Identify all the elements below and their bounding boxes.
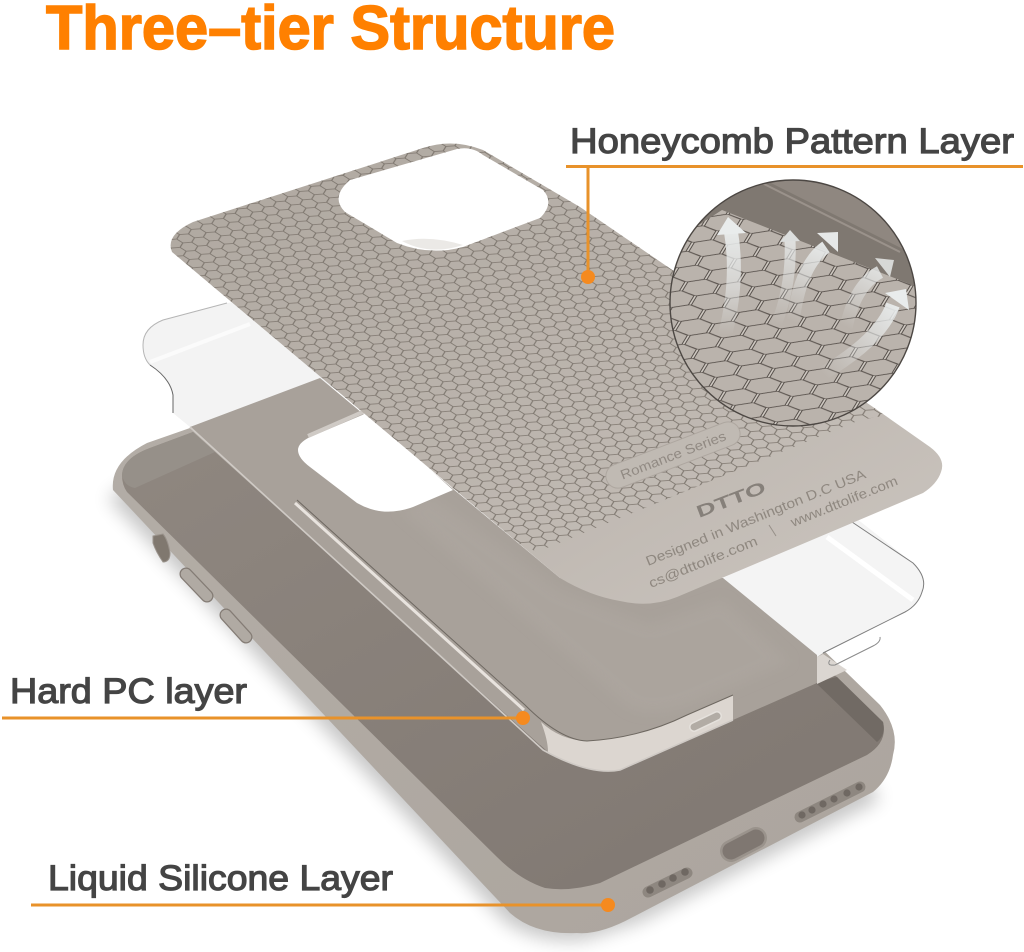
series badge: Romance Series bbox=[618, 428, 728, 483]
side slot bbox=[829, 637, 880, 665]
silicone inner cavity bbox=[122, 432, 884, 889]
highlight stripe on clear corner bbox=[150, 324, 250, 362]
translucent grey plate bbox=[190, 378, 817, 771]
hard PC label text: Hard PC layer bbox=[10, 672, 247, 711]
label: honeycomb pattern layer bbox=[566, 122, 1023, 284]
liquid silicone label text: Liquid Silicone Layer bbox=[48, 859, 393, 898]
inner wall upper left bbox=[122, 432, 215, 488]
label: liquid silicone layer bbox=[31, 859, 615, 912]
bottom slot bbox=[694, 716, 717, 727]
camera opening in PC layer bbox=[298, 413, 453, 512]
magnified honeycomb cells bbox=[670, 212, 916, 424]
honeycomb dot bbox=[581, 270, 595, 284]
series badge bbox=[602, 418, 744, 492]
email: cs@dttolife.com bbox=[647, 533, 760, 591]
highlight stripe lower right bbox=[827, 537, 913, 600]
clear plastic upper left corner bbox=[143, 300, 340, 427]
bottom bevel bbox=[541, 695, 733, 771]
honeycomb underline bbox=[566, 165, 1023, 168]
liquid silicone dot bbox=[601, 898, 615, 912]
honeycomb texture bbox=[170, 144, 883, 551]
hard PC leader bbox=[2, 716, 523, 720]
magnifier circle bbox=[669, 179, 917, 427]
power button bbox=[226, 615, 246, 637]
lower right corner piece bbox=[817, 654, 847, 684]
edge band highlight bbox=[756, 180, 900, 252]
arrow 5 bbox=[822, 289, 909, 374]
honeycomb label text: Honeycomb Pattern Layer bbox=[570, 122, 1014, 161]
divider bbox=[769, 525, 776, 536]
brand mark: DTTO bbox=[694, 478, 769, 522]
left speaker holes bbox=[646, 868, 689, 894]
volume button bbox=[186, 574, 207, 596]
origin line: Designed in Washington D.C USA bbox=[644, 466, 868, 569]
camera opening rim bbox=[308, 411, 365, 436]
case drop shadow bbox=[108, 470, 880, 941]
arrow 4 bbox=[846, 258, 894, 328]
clear plastic dark curved edge bbox=[150, 365, 173, 413]
clear plastic outline bbox=[143, 303, 227, 365]
label: hard PC layer bbox=[2, 672, 530, 725]
website: www.dttolife.com bbox=[787, 473, 900, 530]
clear plastic lower right bbox=[723, 515, 924, 657]
arrow 3 bbox=[793, 232, 838, 322]
right speaker holes bbox=[798, 783, 863, 819]
honeycomb sheet bbox=[171, 143, 942, 604]
lens visible through camera opening bbox=[402, 239, 463, 250]
clear plastic lower right outline bbox=[823, 522, 924, 653]
hard PC dot bbox=[516, 711, 530, 725]
arrow 1 bbox=[717, 217, 746, 335]
magnifier outline bbox=[670, 180, 916, 426]
magnified honeycomb base bbox=[670, 210, 916, 426]
panel: liquid silicone case layer bbox=[108, 428, 895, 941]
panel: honeycomb pattern layer bbox=[171, 143, 942, 604]
mute switch cutout bbox=[153, 534, 170, 562]
silicone outer shell bbox=[113, 428, 895, 933]
dark edge region bbox=[699, 182, 914, 286]
plate outer edge bbox=[190, 427, 733, 771]
panel: hard PC layer bbox=[143, 300, 924, 771]
side bevel highlight bbox=[295, 503, 524, 710]
inner wall right bbox=[815, 677, 884, 742]
honeycomb leader bbox=[586, 166, 590, 277]
lighter tone band on plate bbox=[400, 495, 790, 712]
edge band upper bbox=[771, 181, 902, 248]
arrow 2 bbox=[776, 230, 800, 325]
plate inner edge bbox=[297, 500, 733, 741]
charging port bbox=[731, 838, 756, 851]
liquid silicone leader bbox=[31, 904, 608, 906]
